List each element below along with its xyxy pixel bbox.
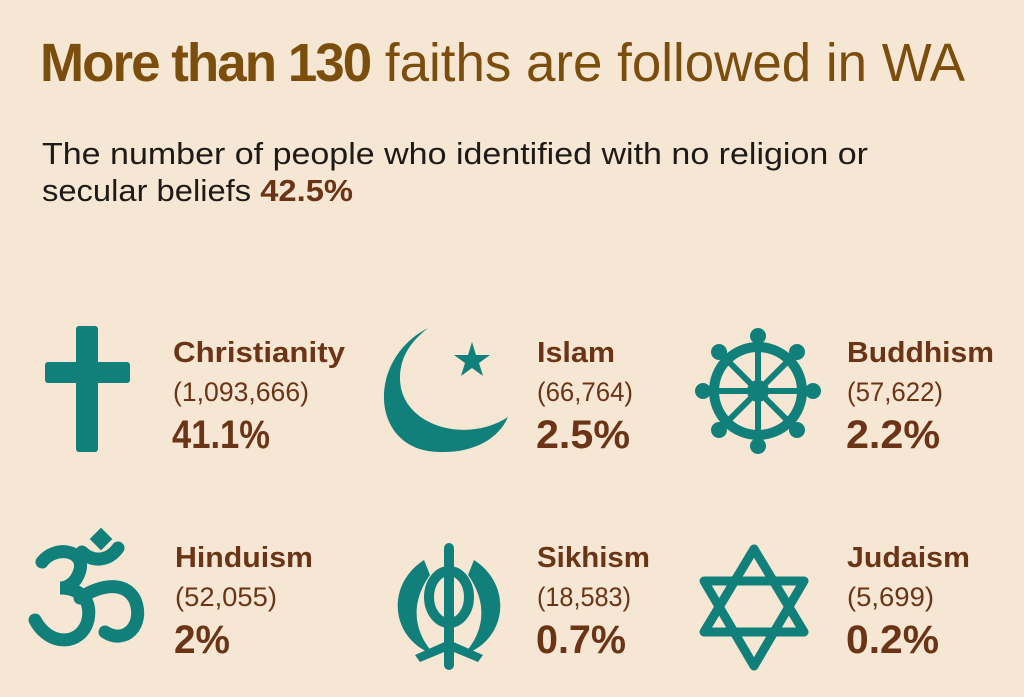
icon: star of david <box>704 549 804 666</box>
icon: khanda <box>398 543 500 670</box>
icon: om <box>35 532 138 640</box>
icon: crescent and star <box>384 328 508 452</box>
text: Judaism <box>846 542 970 662</box>
text: Hinduism: 2% <box>174 618 230 662</box>
text: Sikhism <box>536 542 650 662</box>
text: Judaism: Judaism <box>847 542 970 574</box>
text: Sikhism: 0.7% <box>536 618 626 662</box>
subtitle: secular beliefs 42.5% <box>42 173 353 208</box>
text: Hinduism: Hinduism <box>175 542 313 574</box>
text: Hinduism <box>174 542 313 662</box>
text: Hinduism: (52,055) <box>175 582 277 612</box>
text: Buddhism: Buddhism <box>847 337 994 369</box>
text: Islam <box>536 337 633 457</box>
text: Islam: 2.5% <box>536 413 630 457</box>
text: Judaism: 0.2% <box>846 618 939 662</box>
text: Sikhism: Sikhism <box>537 542 650 574</box>
text: Judaism: (5,699) <box>847 582 934 612</box>
text: Islam: Islam <box>537 337 615 369</box>
text: Christianity: 41.1% <box>172 413 270 457</box>
subtitle <box>42 136 868 208</box>
text: Christianity <box>172 337 345 457</box>
text: Buddhism <box>846 337 994 457</box>
text: Islam: (66,764) <box>537 377 633 407</box>
title: More than 130 faiths are followed in WA <box>40 33 965 93</box>
subtitle: The number of people who identified with no religion or <box>42 136 868 171</box>
icon: dharma wheel <box>695 328 821 454</box>
text: Christianity: Christianity <box>173 337 345 369</box>
icon: cross <box>45 326 130 452</box>
text: Buddhism: (57,622) <box>847 377 943 407</box>
text: Christianity: (1,093,666) <box>173 377 309 407</box>
text: Sikhism: (18,583) <box>537 582 631 612</box>
text: Buddhism: 2.2% <box>846 413 940 457</box>
